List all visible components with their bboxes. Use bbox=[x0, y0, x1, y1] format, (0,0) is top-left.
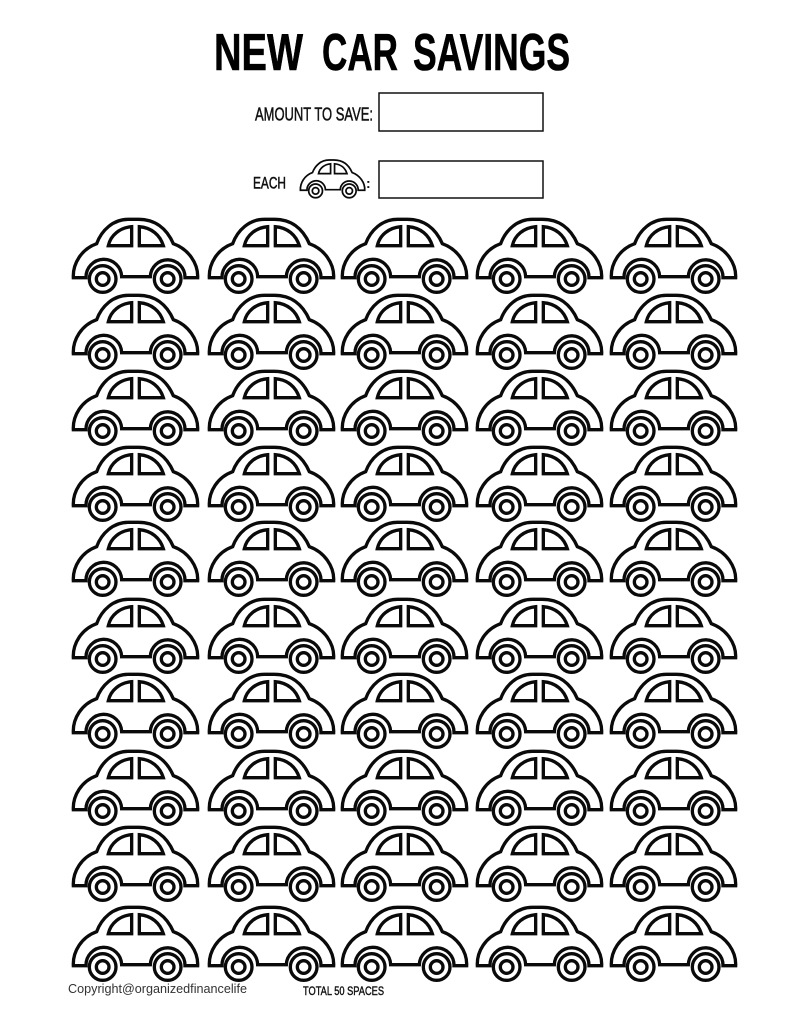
icon: small car bbox=[300, 160, 365, 198]
input box: each car bbox=[379, 161, 543, 198]
title: SAVINGS bbox=[413, 24, 570, 82]
colon after small car: : bbox=[366, 175, 371, 191]
label: each: EACH bbox=[253, 174, 286, 192]
label: amount to save: AMOUNT TO SAVE: bbox=[255, 104, 373, 124]
copyright: Copyright@organizedfinancelife bbox=[68, 981, 247, 996]
input box: amount to save bbox=[379, 93, 543, 131]
title: CAR bbox=[322, 24, 398, 82]
title: NEW bbox=[214, 24, 304, 82]
grid of 50 cars bbox=[73, 219, 736, 980]
total spaces note: TOTAL 50 SPACES bbox=[303, 984, 384, 998]
title bbox=[214, 24, 570, 82]
